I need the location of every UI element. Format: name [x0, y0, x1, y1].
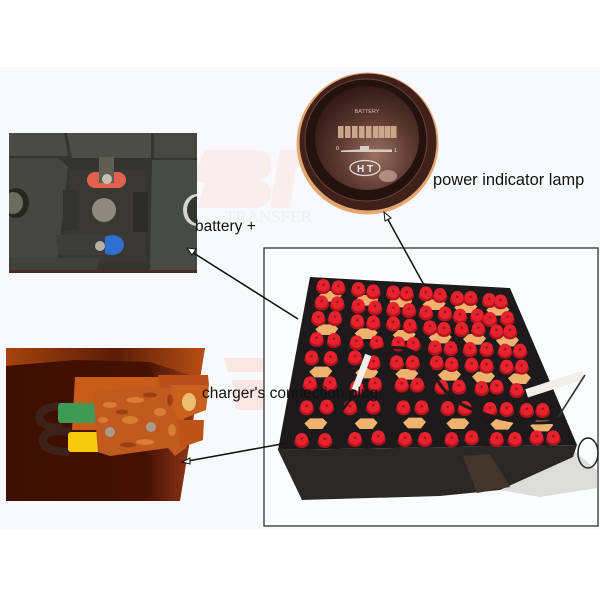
panel: power indicator lamp gauge — [296, 72, 438, 214]
LED bar segments — [338, 126, 396, 138]
label: power indicator lamp: power indicator lamp — [433, 171, 584, 189]
ground behind — [500, 450, 597, 497]
page background — [0, 67, 600, 530]
red positive terminal — [87, 172, 126, 188]
panel: forklift battery — [278, 277, 598, 500]
battery front wall — [278, 445, 577, 500]
watermark logo: TRANSFER — [225, 207, 313, 226]
blue negative terminal — [105, 235, 124, 255]
arrow: to charger plug — [182, 443, 287, 464]
panel: charger connection plug photo — [6, 348, 209, 501]
vent caps — [9, 188, 29, 218]
white cable sleeve — [355, 355, 368, 390]
green sleeve — [58, 403, 96, 423]
panel: power indicator lamp gauge: 1 — [394, 148, 397, 154]
plug body — [93, 382, 186, 456]
panel: power indicator lamp gauge: H T — [357, 164, 373, 175]
panel: battery terminal photo — [3, 133, 211, 273]
label: battery +: battery + — [195, 218, 256, 235]
yellow sleeve — [68, 432, 100, 452]
black cable loop — [578, 438, 598, 468]
red cell caps — [294, 279, 585, 448]
battery top tray — [278, 277, 577, 450]
centre post — [92, 198, 116, 222]
charge scale — [341, 146, 392, 152]
charging cables — [370, 348, 567, 423]
watermark logo — [191, 150, 330, 410]
arrow: to power indicator lamp — [384, 212, 424, 285]
arrow: to battery terminal — [187, 248, 298, 319]
gauge title: BATTERY — [355, 109, 380, 115]
cable loops — [39, 406, 62, 427]
panel: power indicator lamp gauge: 0 — [336, 146, 339, 152]
HT logo — [350, 160, 380, 176]
panel: frame around forklift battery — [264, 248, 598, 526]
label: charger's connection plug: charger's connection plug — [202, 385, 378, 402]
